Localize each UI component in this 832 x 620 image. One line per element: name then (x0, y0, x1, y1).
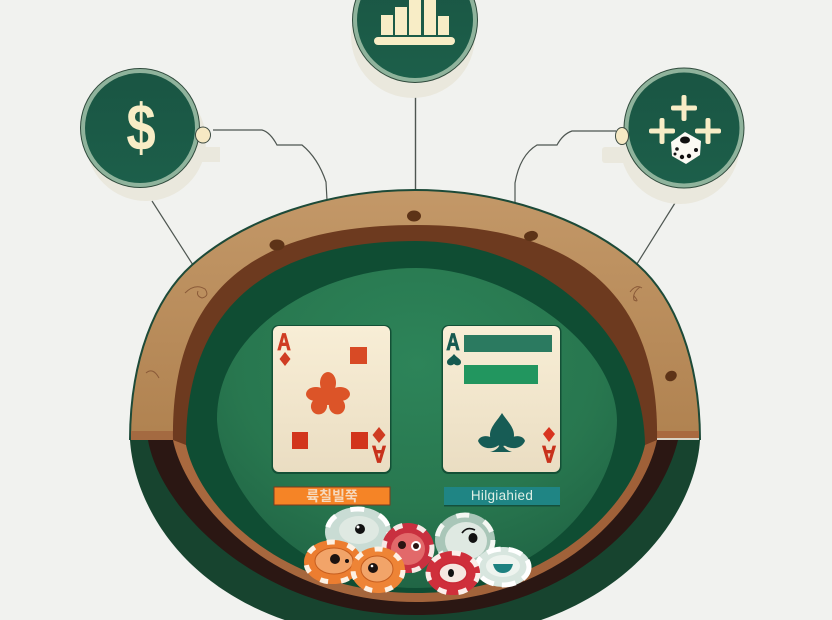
icon: spade pip (478, 413, 525, 452)
table: dark green baize (186, 241, 645, 593)
card: ace of diamonds: A (372, 441, 386, 468)
card: ace of spades (442, 325, 562, 474)
label: teal tag (444, 487, 560, 506)
icon: dollar badge: $ (126, 90, 156, 164)
bar: bright green (464, 365, 538, 384)
chip: orange right (351, 547, 405, 593)
icon: bar chart badge (351, 0, 478, 98)
table: rim holes (270, 210, 679, 383)
table: lower dark band (148, 440, 678, 615)
table: rim end strips (131, 431, 699, 440)
chip: pale green back right (435, 513, 495, 567)
card: ace of spades: A (542, 441, 556, 468)
chip: pale green back left (325, 507, 391, 557)
chips pile (304, 507, 531, 595)
table: wood knots (146, 287, 642, 378)
icon: dollar badge (80, 68, 220, 201)
icon: flower pip (306, 372, 350, 417)
bar: dark green (464, 335, 552, 352)
connector: bar chart to table (414, 93, 416, 192)
table: upper dark brown band (173, 225, 657, 445)
card: ace of diamonds (272, 325, 392, 474)
chip: orange left (304, 540, 362, 584)
connector: dollar to table (152, 130, 327, 265)
poker table (130, 190, 700, 620)
card: ace of spades: A (446, 329, 460, 356)
connector: dice to table (515, 131, 675, 267)
label: orange tag: 륙칠빌쭉 (306, 488, 358, 504)
table: felt (217, 268, 617, 588)
chip: pale front right (475, 547, 531, 587)
table: lower outer ring (130, 440, 700, 620)
card: ace of diamonds: A (277, 329, 291, 356)
table: lower brown band (173, 440, 657, 602)
label: teal tag: Hilgiahied (471, 488, 533, 503)
chip: red back centre (382, 523, 434, 573)
icon: dice badge (602, 68, 744, 204)
label: orange tag (274, 487, 390, 505)
chip: red front (426, 551, 480, 595)
table: upper wooden rim (130, 190, 700, 441)
